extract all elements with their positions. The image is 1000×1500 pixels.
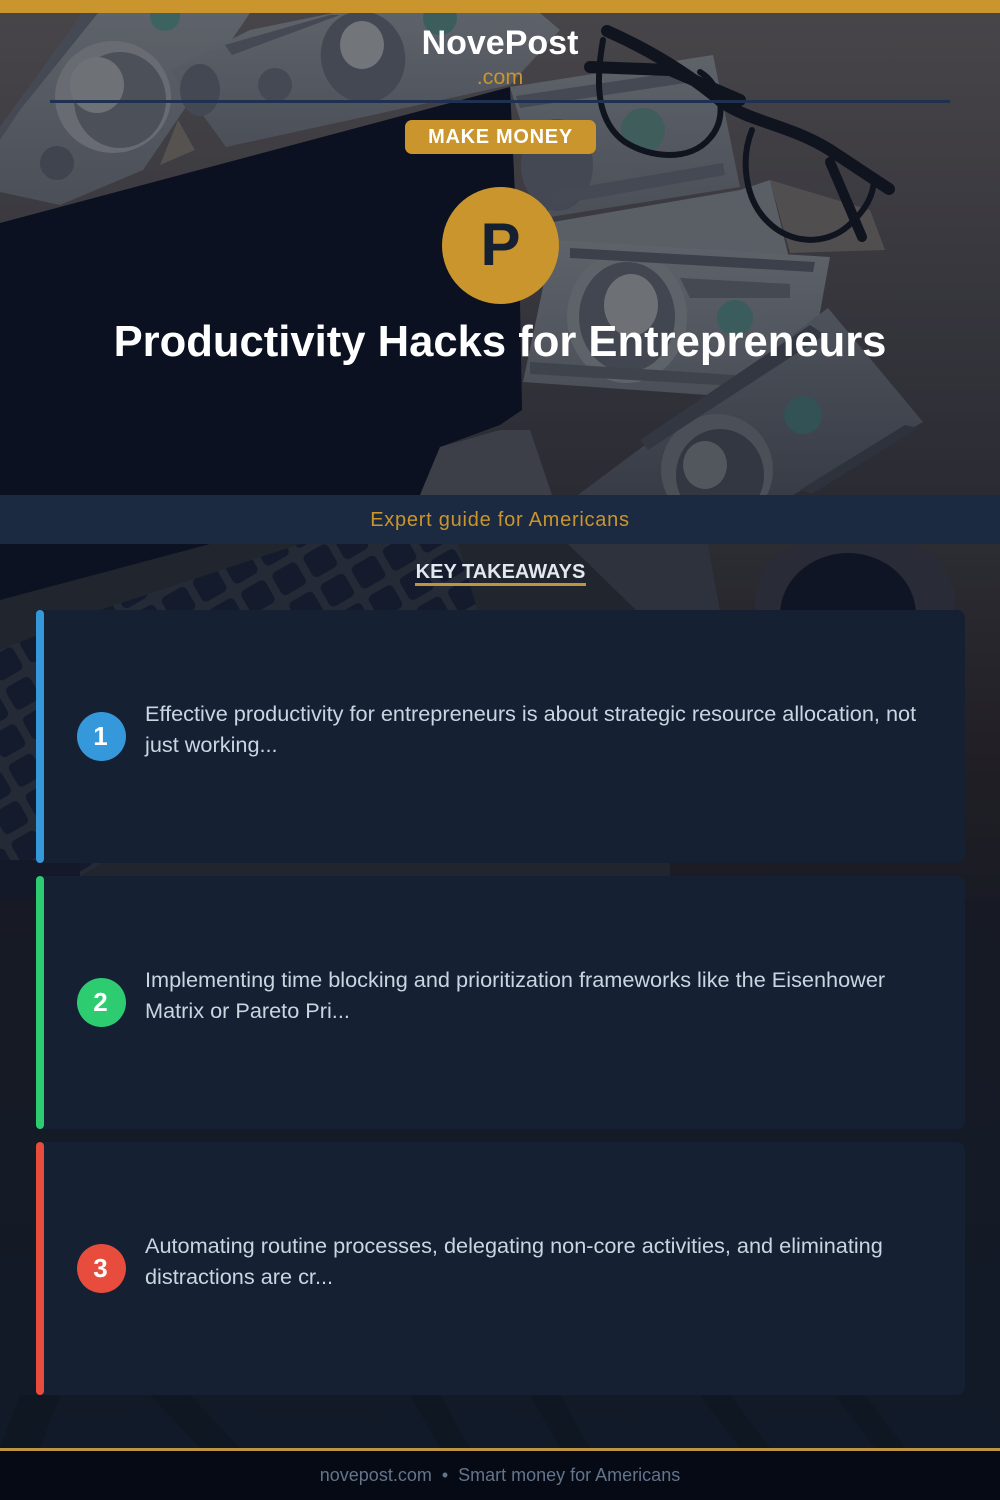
icon: letter P circle: P	[480, 211, 521, 278]
layered bills and paper under right lens	[553, 180, 790, 262]
wood desk upper	[0, 0, 1000, 495]
brand suffix: .com	[477, 65, 523, 89]
panel: takeaway 2	[36, 876, 965, 1129]
panel: takeaway 3: Automating routine processes, delegating non-core activities, and eliminating distractions are cr...	[145, 1233, 883, 1289]
section heading: key takeaways: KEY TAKEAWAYS	[416, 561, 585, 583]
panel: takeaway 1	[36, 610, 965, 863]
panel: takeaway 1: 1	[93, 721, 108, 751]
laptop	[0, 87, 522, 495]
category badge	[405, 120, 596, 154]
panel: takeaway 2: 2	[93, 987, 108, 1017]
subtitle band: Expert guide for Americans	[370, 509, 630, 531]
title: Productivity Hacks for Entrepreneurs	[114, 318, 886, 366]
glasses	[590, 31, 889, 240]
subtitle band	[0, 495, 1000, 544]
brand name: NovePost	[422, 24, 578, 62]
dollar bill, large Franklin	[523, 240, 830, 395]
footer: novepost.com • Smart money for Americans	[320, 1465, 680, 1485]
top accent bar	[0, 0, 1000, 13]
wood sliver between bills	[160, 120, 195, 165]
panel: takeaway 1: Effective productivity for entrepreneurs is about strategic resource allocation, not just working...	[145, 701, 916, 757]
lower desk: darker area	[0, 900, 1000, 1450]
header divider	[50, 100, 950, 103]
mouse device	[420, 430, 552, 495]
dollar bill, Washington	[170, 1, 560, 147]
panel: takeaway 2: Implementing time blocking and prioritization frameworks like the Eisenhower Matrix or Pareto Pri...	[145, 967, 885, 1023]
panel: takeaway 3	[36, 1142, 965, 1395]
dollar bill under glasses	[510, 55, 740, 217]
panel: takeaway 3: 3	[93, 1253, 108, 1283]
dollar bill, left Franklin	[0, 1, 250, 205]
category badge: MAKE MONEY	[428, 126, 573, 148]
dollar bill, lower right Franklin	[578, 308, 923, 526]
footer	[0, 1448, 1000, 1500]
lower desk: laptop body, bill and cup	[0, 530, 1000, 920]
icon: letter P circle	[442, 187, 559, 304]
